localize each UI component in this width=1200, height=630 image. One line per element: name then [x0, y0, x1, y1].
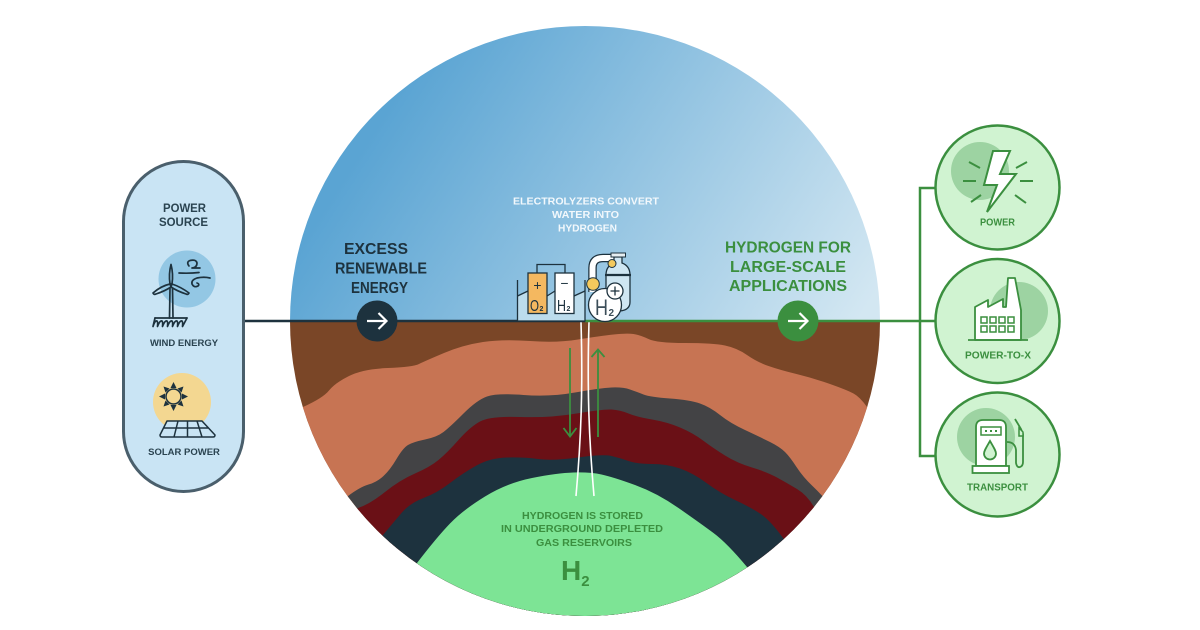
- panel: power application: [936, 126, 1060, 250]
- icon: lightning bolt: [951, 142, 1033, 212]
- icon: factory: [968, 278, 1048, 340]
- heading: excess renewable energy: [335, 241, 427, 297]
- anode: O: [530, 298, 539, 315]
- heading: excess renewable energy: RENEWABLE: [335, 260, 427, 278]
- heading: power source: SOURCE: [159, 215, 208, 229]
- label: wind energy: WIND ENERGY: [150, 338, 219, 349]
- valves: [608, 260, 616, 268]
- panel: power-to-x application: [936, 259, 1060, 383]
- hydrogen sphere: H: [595, 295, 608, 320]
- wire: [537, 264, 565, 273]
- anode: [528, 273, 547, 315]
- panel: power source: [124, 162, 244, 492]
- arrow: down into reservoir: [564, 348, 576, 436]
- text: electrolyzers: HYDROGEN: [558, 222, 617, 234]
- text: storage: IN UNDERGROUND DEPLETED: [501, 523, 663, 535]
- heading: excess renewable energy: EXCESS: [344, 241, 408, 258]
- cathode: −: [560, 275, 569, 291]
- heading: hydrogen for large-scale applications: HYDROGEN FOR: [725, 240, 851, 256]
- heading: hydrogen for large-scale applications: LARGE-SCALE: [730, 259, 846, 276]
- icon: fuel pump: [957, 408, 1023, 473]
- icon: wind turbine: [153, 250, 216, 326]
- label: H2: H: [561, 555, 581, 586]
- arrow: up out of reservoir: [592, 350, 604, 437]
- layer: topsoil: [280, 321, 890, 621]
- heading: excess renewable energy: ENERGY: [351, 280, 409, 297]
- text: storage: GAS RESERVOIRS: [536, 537, 632, 549]
- text: storage: [501, 510, 663, 549]
- label: solar power: SOLAR POWER: [148, 447, 220, 458]
- label: transport: TRANSPORT: [967, 482, 1028, 494]
- water tank: [518, 291, 585, 321]
- storage bottle: [606, 257, 630, 311]
- text: electrolyzers: WATER INTO: [552, 209, 619, 221]
- heading: power source: POWER: [163, 201, 206, 215]
- well pipes: [576, 322, 594, 496]
- sky: [280, 20, 890, 321]
- text: electrolyzers: [513, 196, 660, 234]
- label: power-to-x: POWER-TO-X: [965, 350, 1031, 362]
- arrow badge: renewable energy: [356, 300, 398, 342]
- anode: +: [533, 277, 542, 293]
- label: power: POWER: [980, 218, 1016, 228]
- heading: hydrogen for large-scale applications: APPLICATIONS: [729, 278, 847, 295]
- layer: grey rock: [340, 387, 830, 630]
- arrow badge: hydrogen: [778, 300, 818, 342]
- text: electrolyzers: ELECTROLYZERS CONVERT: [513, 196, 660, 208]
- icon: electrolyzer: [518, 253, 631, 322]
- anode: 2: [540, 306, 544, 313]
- text: storage: HYDROGEN IS STORED: [522, 510, 643, 522]
- hydrogen sphere: 2: [608, 308, 614, 319]
- icon: solar panel: [153, 373, 215, 437]
- layer: navy caprock: [382, 455, 784, 616]
- panel: transport application: [936, 392, 1060, 516]
- cathode: H: [557, 298, 566, 315]
- infographic: [122, 26, 1061, 616]
- panel: central earth cross-section: [280, 20, 900, 630]
- connector: hydrogen line and bracket: [585, 188, 935, 456]
- layer: dark red rock: [350, 409, 825, 630]
- label: H2: 2: [581, 573, 590, 590]
- heading: hydrogen for large-scale applications: [725, 240, 851, 295]
- layer: hydrogen reservoir: [416, 472, 748, 616]
- hydrogen sphere: [588, 283, 623, 322]
- cathode: 2: [566, 306, 570, 313]
- heading: power source: [159, 201, 208, 229]
- connector: power source line: [244, 320, 585, 322]
- layer: clay: [302, 334, 868, 616]
- cathode: [555, 273, 574, 315]
- pipe: [592, 258, 614, 292]
